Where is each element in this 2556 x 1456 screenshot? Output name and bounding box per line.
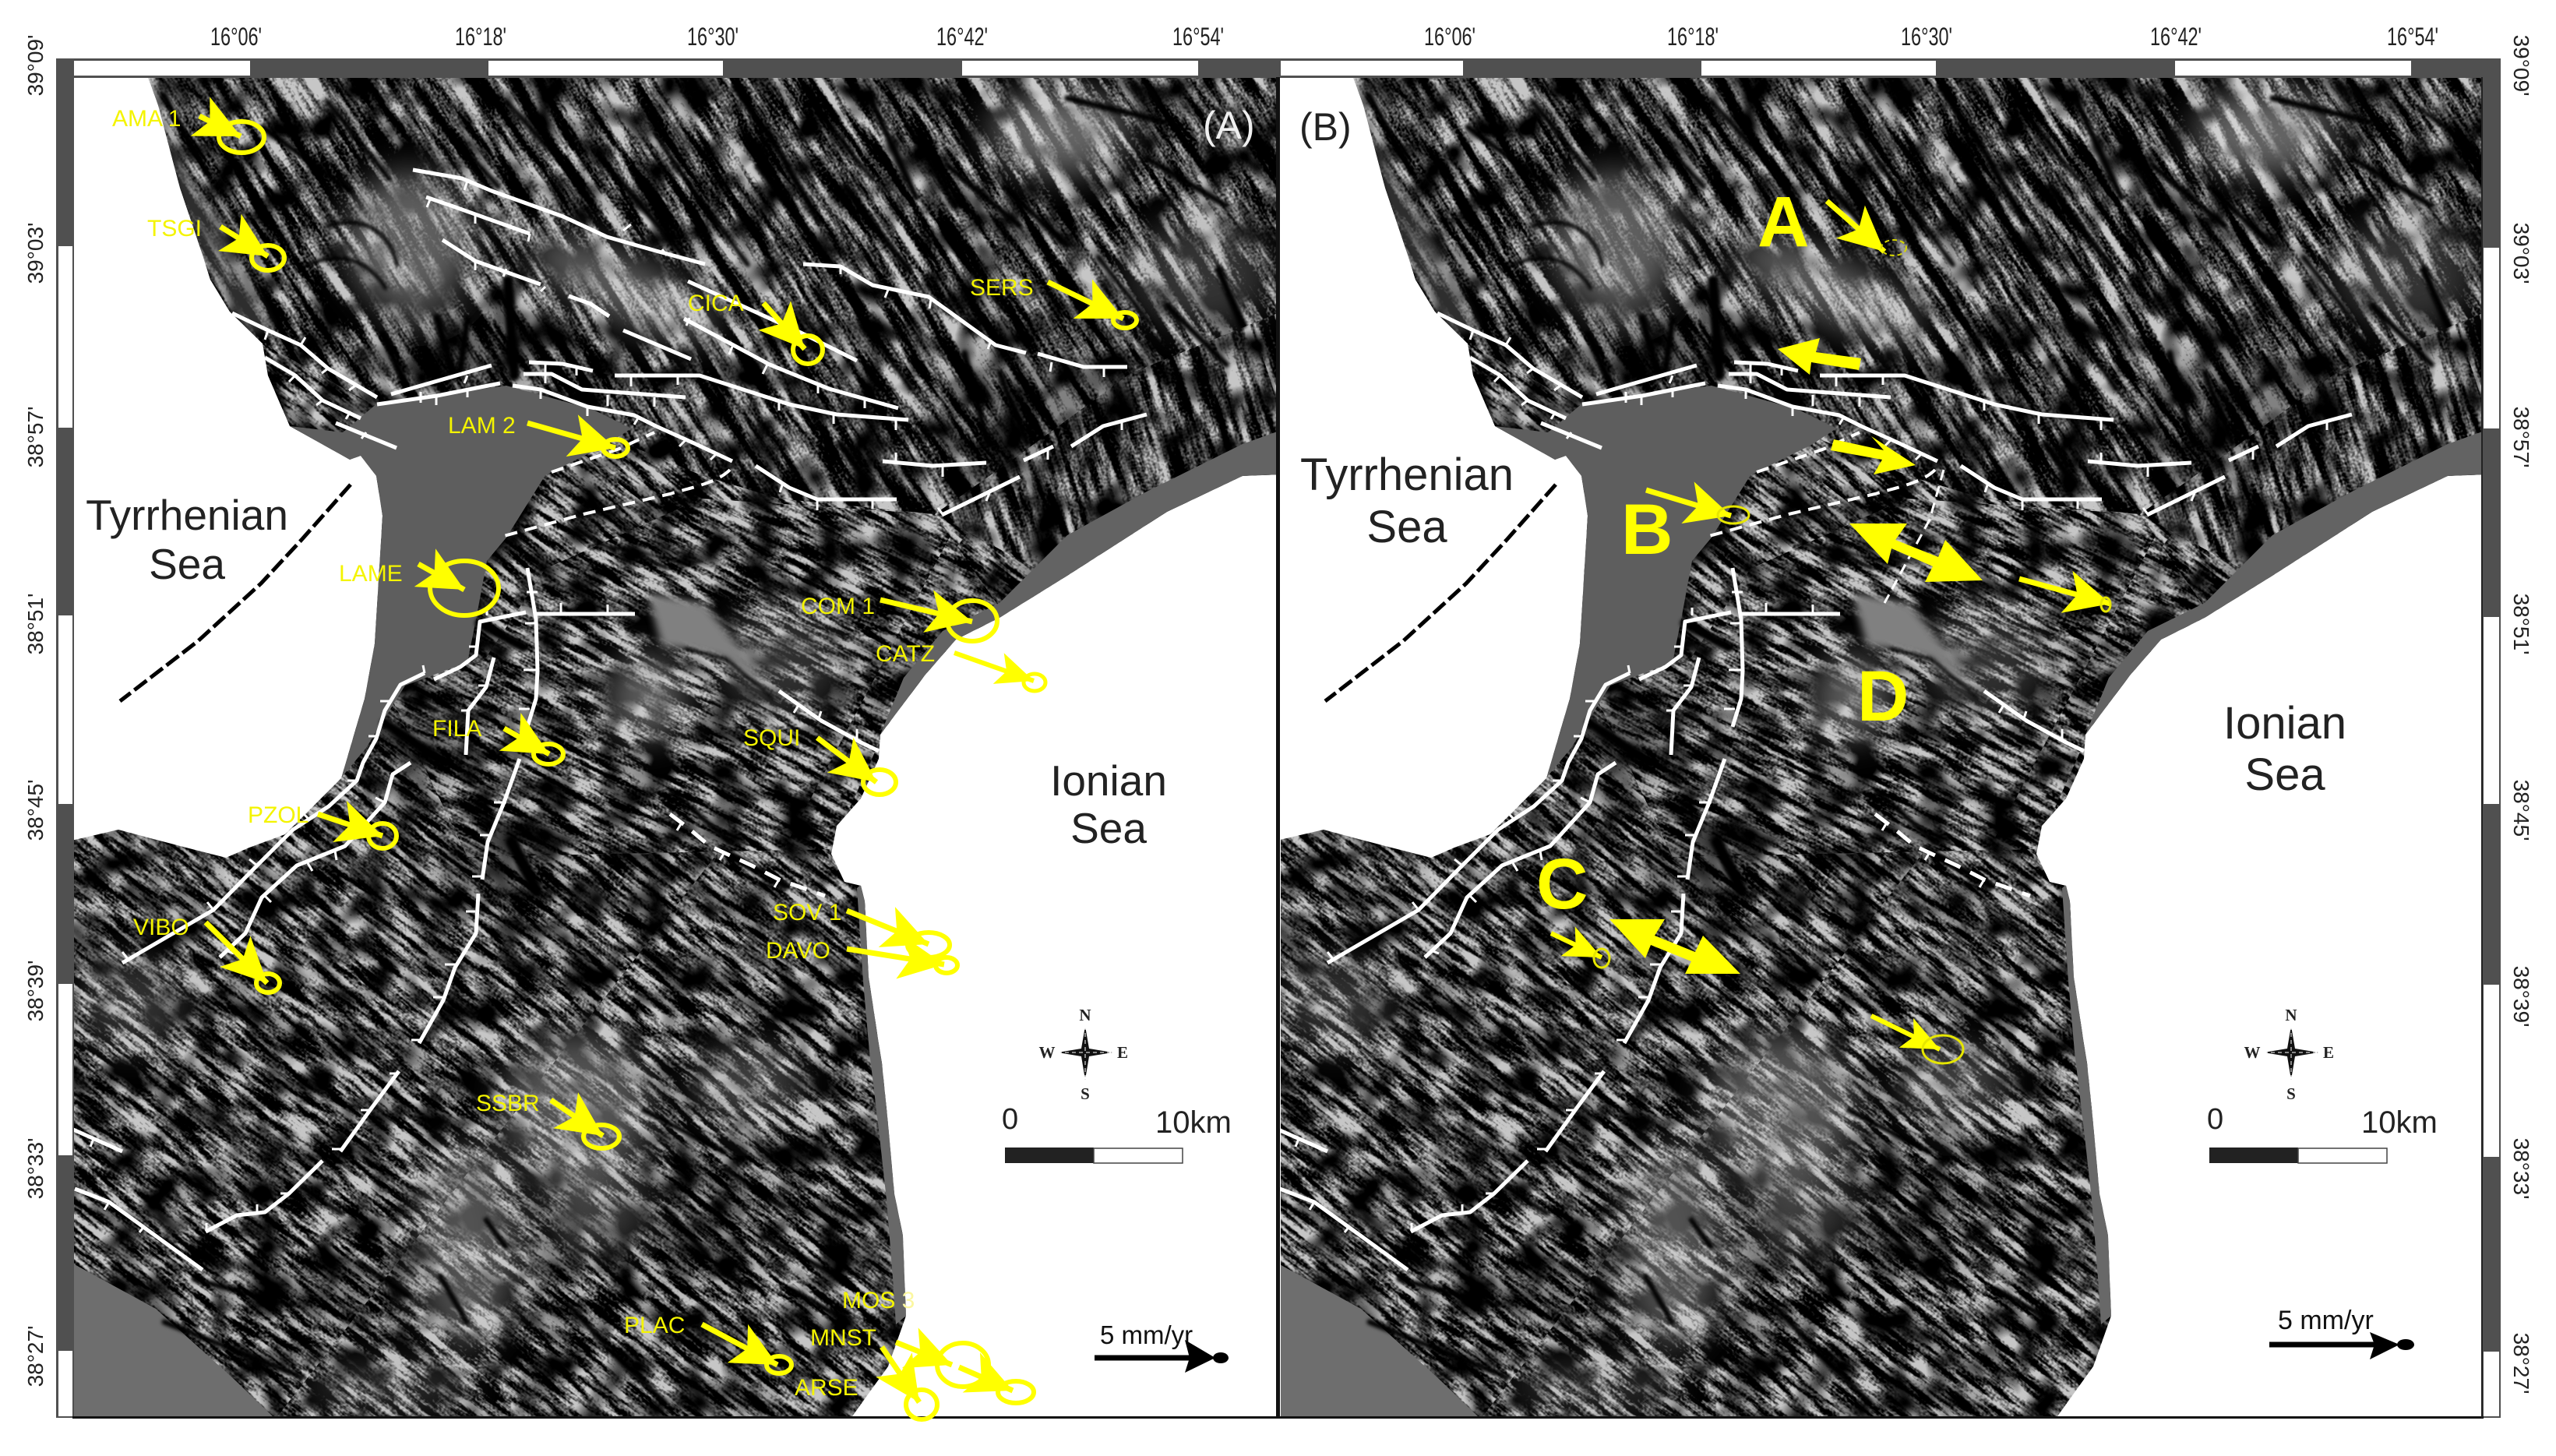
double arrow extension, southern — [1609, 919, 1740, 974]
GPS station LAME: LAME — [339, 561, 403, 587]
latitude labels right: 38°45' — [2509, 780, 2533, 841]
sea label: Tyrrhenian Sea, panel A: Sea — [149, 540, 225, 588]
longitude labels: 16°42' — [936, 23, 988, 51]
latitude labels right: 39°09' — [2509, 35, 2533, 96]
velocity arrow southern block — [1871, 1016, 1963, 1063]
GPS station COM 1 — [801, 594, 997, 641]
latitude labels right: 38°33' — [2509, 1138, 2533, 1199]
GPS station TSGI — [147, 216, 284, 270]
GPS station FILA — [432, 716, 563, 764]
GPS station SERS — [970, 275, 1137, 328]
GPS station LAM 2: LAM 2 — [448, 413, 516, 439]
latitude labels right: 38°57' — [2509, 407, 2533, 467]
GPS station PLAC — [624, 1313, 791, 1373]
compass rose panel B: S — [2286, 1084, 2296, 1103]
GPS station VIBO — [133, 915, 280, 992]
strike-slip arrow, eastward — [1831, 436, 1916, 474]
panel tag (B): (B) — [1299, 105, 1352, 149]
GPS station DAVO: DAVO — [766, 938, 830, 964]
compass rose panel A: E — [1117, 1043, 1128, 1062]
longitude labels — [210, 23, 2438, 51]
longitude labels: 16°54' — [1172, 23, 1224, 51]
sea label: Ionian Sea, panel B: Sea — [2244, 749, 2325, 800]
GPS station PZOL — [248, 802, 397, 848]
velocity arrow domain C — [1551, 933, 1609, 968]
scale bar panel B: 10km — [2361, 1105, 2438, 1140]
GPS station COM 1: COM 1 — [801, 594, 875, 619]
longitude labels: 16°18' — [1667, 23, 1719, 51]
latitude labels right — [2509, 35, 2533, 1394]
panel tag (A): (A) — [1203, 104, 1255, 147]
GPS station TSGI: TSGI — [147, 216, 202, 241]
GPS station MOS 3 — [842, 1288, 989, 1387]
latitude labels left: 38°45' — [23, 780, 48, 841]
latitude labels right: 39°03' — [2509, 223, 2533, 284]
GPS station ARSE — [795, 1347, 937, 1419]
latitude labels left: 38°39' — [23, 961, 48, 1021]
compass rose panel A: W — [1039, 1043, 1055, 1062]
domain label C: C — [1536, 844, 1588, 924]
GPS station SSBR: SSBR — [476, 1091, 540, 1116]
scale bar panel A: 10km — [1155, 1105, 1232, 1140]
sea label: Tyrrhenian Sea, panel B: Tyrrhenian — [1300, 449, 1514, 500]
GPS station SERS: SERS — [970, 275, 1034, 301]
velocity scale arrow panel A — [1095, 1320, 1229, 1373]
compass rose panel B — [2244, 1006, 2334, 1103]
longitude labels: 16°06' — [210, 23, 262, 51]
scale bar panel A: 0 — [1002, 1103, 1018, 1136]
GPS station ARSE: ARSE — [795, 1375, 858, 1401]
GPS station LAM 2 — [448, 413, 628, 457]
GPS station MNST: MNST — [810, 1325, 876, 1351]
latitude labels right: 38°39' — [2509, 966, 2533, 1027]
GPS station SSBR — [476, 1091, 619, 1148]
domain label D: D — [1857, 657, 1909, 736]
GPS station SOV 1: SOV 1 — [773, 900, 841, 925]
GPS station LAME — [339, 561, 499, 615]
compass rose panel B: E — [2323, 1043, 2334, 1062]
scale bar panel B: 0 — [2207, 1103, 2223, 1136]
GPS station PLAC: PLAC — [624, 1313, 685, 1338]
sea label: Ionian Sea, panel A: Sea — [1070, 804, 1147, 852]
domain label B: B — [1621, 490, 1673, 569]
northern faults, panel A only — [413, 170, 1127, 408]
GPS station MOS 3: MOS 3 — [842, 1288, 915, 1313]
latitude labels left — [23, 35, 48, 1387]
map frame: left graticule band — [56, 58, 74, 1418]
panel B: terrain with faults (hillshade map) — [1275, 77, 2487, 1417]
map frame: right graticule band — [2482, 58, 2501, 1418]
latitude labels left: 38°33' — [23, 1138, 48, 1199]
GPS station SQUI — [743, 725, 896, 795]
velocity scale arrow panel A: 5 mm/yr — [1100, 1320, 1193, 1349]
compass rose panel A — [1039, 1006, 1128, 1103]
velocity arrow domain B — [1646, 490, 1749, 524]
velocity scale arrow panel B: 5 mm/yr — [2278, 1306, 2374, 1335]
dashed N-S transverse fault, panel B only — [1884, 470, 1944, 603]
latitude labels left: 39°09' — [23, 35, 48, 96]
longitude labels: 16°42' — [2150, 23, 2202, 51]
map frame: top graticule band — [56, 58, 2501, 78]
longitude labels: 16°54' — [2387, 23, 2438, 51]
panel A: terrain with faults (hillshade map) — [70, 77, 1282, 1417]
double arrow extension, northern — [1849, 524, 1983, 582]
GPS station AMA 1 — [112, 106, 264, 153]
velocity arrow domain A — [1827, 201, 1906, 256]
sea label: Tyrrhenian Sea, panel A: Tyrrhenian — [86, 491, 288, 539]
scale bar panel A — [1002, 1103, 1232, 1163]
compass rose panel A: N — [1079, 1006, 1091, 1024]
velocity scale arrow panel B — [2269, 1306, 2414, 1359]
domain label A: A — [1757, 182, 1809, 262]
GPS station CATZ — [876, 641, 1045, 691]
compass rose panel B: N — [2285, 1006, 2297, 1024]
GPS station AMA 1: AMA 1 — [112, 106, 181, 132]
sea label: Tyrrhenian Sea, panel B: Sea — [1366, 502, 1447, 552]
longitude labels: 16°30' — [1901, 23, 1952, 51]
GPS station SQUI: SQUI — [743, 725, 800, 751]
latitude labels right: 38°51' — [2509, 594, 2533, 654]
GPS station MNST — [810, 1325, 1034, 1403]
GPS station VIBO: VIBO — [133, 915, 189, 940]
sea label: Ionian Sea, panel A: Ionian — [1050, 756, 1167, 805]
compass rose panel A: S — [1081, 1084, 1090, 1103]
longitude labels: 16°06' — [1424, 23, 1475, 51]
scale bar panel B — [2207, 1103, 2438, 1163]
GPS station CATZ: CATZ — [876, 641, 935, 667]
latitude labels left: 38°27' — [23, 1326, 48, 1387]
GPS station DAVO — [766, 938, 957, 973]
GPS station PZOL: PZOL — [248, 802, 308, 828]
GPS station FILA: FILA — [432, 716, 481, 742]
latitude labels right: 38°27' — [2509, 1333, 2533, 1394]
GPS station SOV 1 — [773, 900, 950, 957]
GPS station CICA — [688, 291, 823, 364]
latitude labels left: 39°03' — [23, 223, 48, 284]
latitude labels left: 38°51' — [23, 594, 48, 654]
sea label: Ionian Sea, panel B: Ionian — [2223, 698, 2346, 749]
longitude labels: 16°18' — [455, 23, 506, 51]
velocity arrow east of domain D — [2019, 579, 2110, 612]
latitude labels left: 38°57' — [23, 407, 48, 467]
GPS station CICA: CICA — [688, 291, 744, 316]
compass rose panel B: W — [2244, 1043, 2261, 1062]
strike-slip arrow, westward — [1778, 338, 1861, 375]
longitude labels: 16°30' — [687, 23, 739, 51]
